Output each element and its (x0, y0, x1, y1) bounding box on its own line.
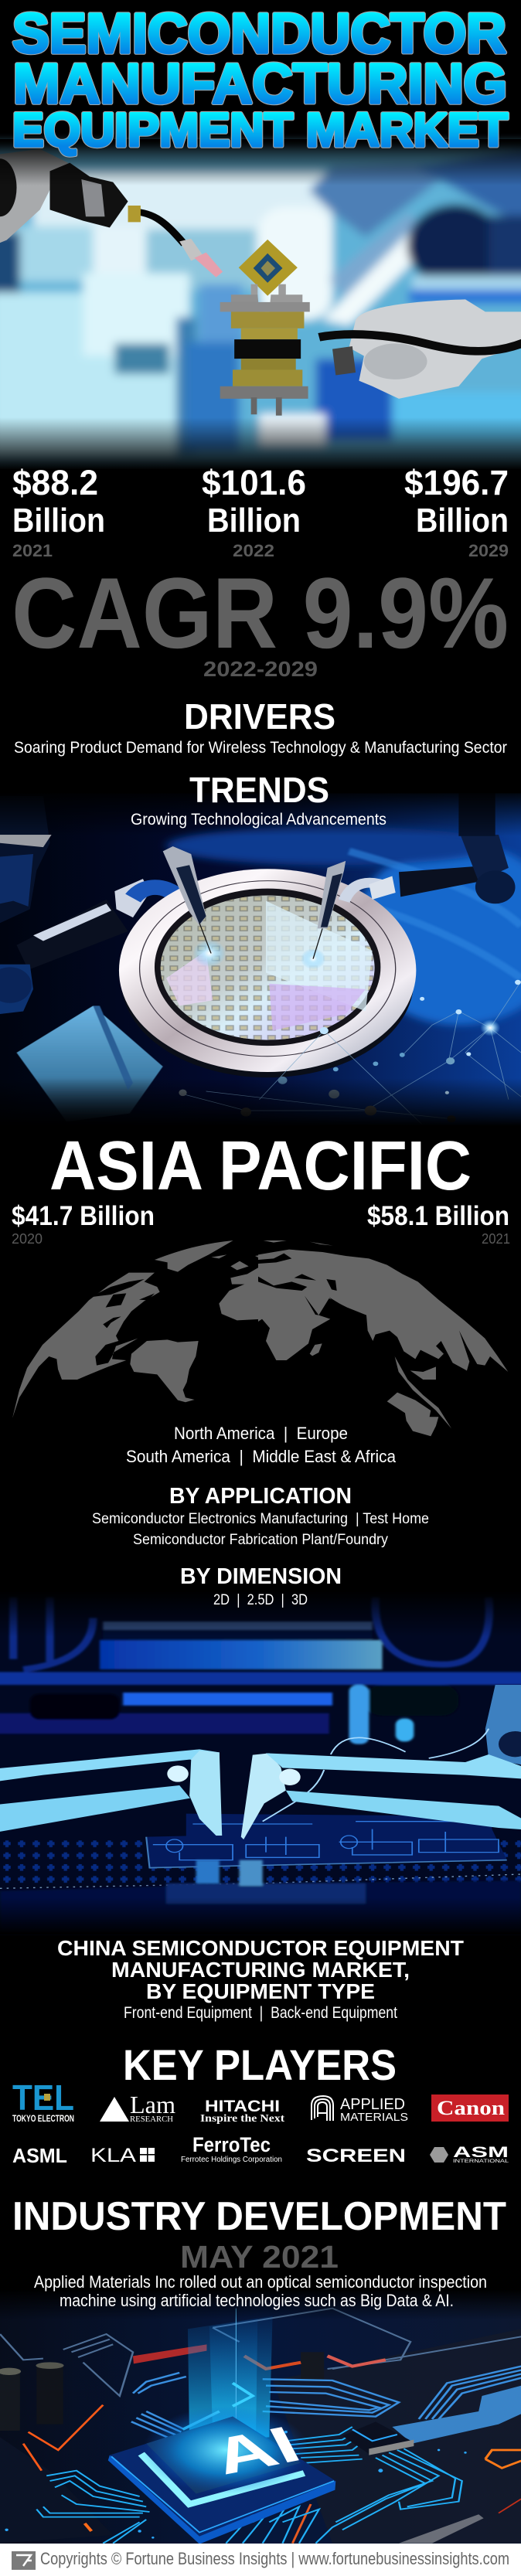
stat: 2022 market size: $101.6 (202, 463, 306, 502)
industry development heading: INDUSTRY DEVELOPMENT (12, 2194, 506, 2239)
trends heading: TRENDS (189, 770, 329, 810)
stat: 2022 market size (202, 463, 306, 560)
right small chip (342, 2421, 414, 2455)
regions list: North America | Europe (174, 1424, 348, 1443)
logo: Applied Materials: MATERIALS (340, 2111, 408, 2124)
title (12, 3, 508, 156)
application list: Semiconductor Fabrication Plant/Foundry (133, 1532, 388, 1548)
network nodes (179, 980, 521, 1122)
scattered sparks (5, 2431, 467, 2539)
wafer (161, 896, 375, 1040)
logo: Tokyo Electron: TOKYO ELECTRON (12, 2113, 74, 2124)
world map globe (12, 1240, 508, 1436)
China market heading: CHINA SEMICONDUCTOR EQUIPMENT (57, 1936, 464, 1960)
upper blue trace bundles (131, 2367, 521, 2440)
title: EQUIPMENT MARKET (12, 104, 508, 156)
holographic beam (182, 2309, 273, 2442)
logo: Tokyo Electron: TEL (12, 2077, 74, 2118)
stat: Asia Pacific 2021: 2021 (482, 1231, 510, 1247)
image: blue probe arms over circuit board (0, 1591, 521, 1935)
logo: Lam Research: RESEARCH (130, 2115, 173, 2124)
stat: 2029 market size: $196.7 (404, 463, 509, 502)
bottom right bar (399, 2514, 484, 2544)
logo: Hitachi: HITACHI (205, 2098, 280, 2115)
stat: 2029 market size: 2029 (468, 541, 509, 560)
stat: Asia Pacific 2020 (12, 1201, 155, 1247)
footer (0, 2544, 521, 2576)
icon: Fortune Business Insights logo (12, 2551, 36, 2570)
left probe arm (0, 1749, 222, 1836)
red and orange traces (23, 2344, 521, 2544)
logo: Ferrotec: FerroTec (192, 2133, 271, 2156)
logo: Hitachi: Inspire the Next (200, 2113, 284, 2125)
logo: Applied Materials (312, 2096, 408, 2124)
logo: Canon (431, 2094, 509, 2122)
development date: MAY 2021 (180, 2239, 339, 2275)
left probe (163, 846, 211, 954)
logo: Applied Materials: APPLIED (340, 2096, 405, 2113)
stat: Asia Pacific 2021 (367, 1201, 510, 1247)
stat: Asia Pacific 2020: $41.7 Billion (12, 1201, 155, 1231)
outline traces in steel blue (0, 2309, 521, 2396)
logo: KLA: KLA (90, 2145, 136, 2166)
logo: Lam Research (100, 2091, 175, 2124)
logo: ASML: ASML (12, 2144, 67, 2167)
logo: Lam Research: Lam (130, 2091, 175, 2118)
logo: Screen: SCREEN (306, 2146, 406, 2166)
machine band behind arms (0, 1598, 521, 1744)
left arm tube (0, 879, 186, 1014)
stat: Asia Pacific 2020: 2020 (12, 1231, 43, 1247)
development text: machine using artificial technologies such as Big Data & AI. (60, 2291, 454, 2310)
China market heading: BY EQUIPMENT TYPE (146, 1979, 375, 2003)
right arm and probe (313, 793, 515, 959)
title: EQUIPMENT MARKET (12, 104, 508, 156)
fixture holding the chip (220, 284, 310, 416)
logo: ASM International: INTERNATIONAL (453, 2159, 509, 2164)
drivers heading: DRIVERS (184, 696, 335, 737)
dimension heading: BY DIMENSION (180, 1564, 342, 1589)
China market heading: MANUFACTURING MARKET, (111, 1958, 410, 1982)
capacitors left (0, 2352, 324, 2431)
trends text: Growing Technological Advancements (131, 811, 386, 829)
application list: Semiconductor Electronics Manufacturing | Test Home (92, 1511, 429, 1527)
stat: 2021 market size: Billion (12, 502, 105, 539)
application list (92, 1511, 429, 1548)
logo: ASM International: ASM (453, 2145, 509, 2161)
regions list (126, 1424, 397, 1466)
logo: Canon: Canon (437, 2097, 506, 2119)
stat: 2021 market size: $88.2 (12, 463, 98, 502)
light panel (17, 1006, 163, 1121)
right robot arm with cable (319, 299, 521, 399)
China market heading (57, 1936, 464, 2003)
stat: 2021 market size (12, 463, 105, 560)
logo: ASM International (430, 2145, 509, 2164)
image: robot arms assembling a chip (0, 139, 521, 485)
chip (239, 240, 298, 296)
stat: 2022 market size: 2022 (233, 541, 274, 560)
application heading: BY APPLICATION (169, 1484, 352, 1509)
right trace bus (392, 2386, 521, 2444)
CAGR period: 2022-2029 (203, 657, 318, 681)
equipment type list: Front-end Equipment | Back-end Equipment (124, 2004, 397, 2022)
stat: 2021 market size: 2021 (12, 541, 53, 560)
development text (34, 2272, 487, 2310)
image: AI chip on circuit board (0, 2289, 521, 2544)
right probe arm (241, 1753, 521, 1839)
title: SEMICONDUCTOR (12, 3, 506, 65)
region heading: ASIA PACIFIC (49, 1128, 472, 1205)
network overlay (182, 981, 521, 1125)
image: wafer probing station (0, 788, 521, 1135)
logo: Ferrotec: Ferrotec Holdings Corporation (181, 2156, 282, 2164)
logo: KLA (90, 2145, 155, 2166)
stat: 2022 market size: Billion (207, 502, 301, 539)
regions list: South America | Middle East & Africa (126, 1447, 397, 1466)
key players heading: KEY PLAYERS (123, 2040, 397, 2089)
circuit board (0, 1814, 521, 1888)
silver chuck ring (119, 869, 416, 1077)
left column (0, 796, 52, 923)
title: SEMICONDUCTOR (12, 3, 506, 65)
logo: Ferrotec (181, 2133, 282, 2164)
left robot arm with torch (0, 149, 223, 277)
title: MANUFACTURING (13, 53, 507, 115)
AI processor: AI (201, 2415, 310, 2486)
lower machine bed (0, 1860, 521, 1932)
AI processor (108, 2406, 335, 2544)
steel plate upper right (263, 1685, 521, 1822)
title: MANUFACTURING (13, 53, 507, 115)
stat: Asia Pacific 2021: $58.1 Billion (367, 1201, 509, 1231)
center to right traces (36, 2427, 462, 2544)
stat: 2029 market size: Billion (416, 502, 509, 539)
dimension list: 2D | 2.5D | 3D (213, 1592, 308, 1608)
logo: Hitachi (200, 2098, 284, 2125)
stat: 2029 market size (404, 463, 509, 560)
